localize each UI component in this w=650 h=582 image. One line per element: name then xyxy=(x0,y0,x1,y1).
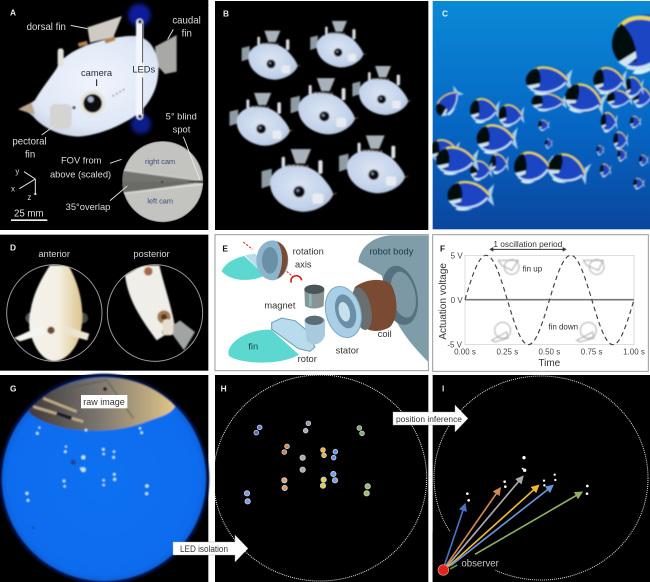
position arrows xyxy=(444,477,582,569)
axis label y: y xyxy=(15,167,19,176)
x tick labels: 0.50 s xyxy=(538,348,560,357)
label: panel letter G: G xyxy=(10,384,16,394)
color coded LED dots xyxy=(244,421,370,504)
observer marker xyxy=(438,565,449,575)
coil xyxy=(353,280,396,331)
label: posterior: posterior xyxy=(133,249,170,259)
label: rotor: rotor xyxy=(298,354,317,364)
label: coil: coil xyxy=(378,329,392,339)
magnet xyxy=(304,289,324,308)
observer label backdrop xyxy=(433,532,510,582)
fisheye camera view xyxy=(0,374,209,582)
label: FOV from above: above (scaled) xyxy=(50,169,111,179)
axes icon xyxy=(19,172,36,195)
x tick labels xyxy=(454,348,645,357)
pointer: pectoral fin xyxy=(42,124,57,135)
label: panel letter B: B xyxy=(223,8,229,18)
label: panel letter A: A xyxy=(10,8,16,18)
scale bar: 25 mm xyxy=(14,209,44,220)
x tick labels: 1.00 s xyxy=(623,348,645,357)
detected LED spots xyxy=(25,427,149,502)
pointer: blind spot xyxy=(183,137,200,180)
label: caudal fin: caudal xyxy=(172,15,201,26)
panel I: position inference xyxy=(433,375,650,582)
label: anterior: anterior xyxy=(38,249,70,259)
dotted field-of-view ellipse xyxy=(434,376,648,580)
fish photo A xyxy=(18,4,177,137)
label: blind spot: spot xyxy=(173,125,191,135)
label: caudal fin: fin xyxy=(182,29,192,40)
body hub xyxy=(377,262,423,328)
inferred positions xyxy=(466,456,589,502)
label: raw image xyxy=(81,395,127,408)
anterior view xyxy=(7,265,102,361)
pointer: dorsal fin xyxy=(71,25,87,29)
x tick labels: 0.25 s xyxy=(496,348,518,357)
swarm of robot fish xyxy=(229,21,411,212)
period arrow xyxy=(489,247,567,252)
zero line xyxy=(465,297,634,302)
y tick labels: -5 V xyxy=(447,340,463,349)
exploded actuator xyxy=(222,235,428,363)
rotation axis dashes xyxy=(243,242,293,277)
label: observer: observer xyxy=(461,559,500,570)
assembled inset xyxy=(222,256,265,280)
label: panel letter E: E xyxy=(222,243,228,253)
dotted field-of-view ellipse xyxy=(213,375,427,581)
panel A: robot fish anatomy xyxy=(0,0,208,230)
panel C: reef fish school xyxy=(430,1,650,229)
label: fin down: fin down xyxy=(548,323,578,332)
rotor xyxy=(272,318,315,351)
plot frame xyxy=(465,255,634,345)
arrow: LED isolation xyxy=(173,535,248,562)
pointer: LEDs xyxy=(141,23,144,114)
label: overlap: 35°overlap xyxy=(66,202,110,212)
panel H: LED isolation xyxy=(213,375,428,582)
arrow: position inference xyxy=(393,405,468,432)
x tick labels: 0.75 s xyxy=(581,348,603,357)
label: panel letter H: H xyxy=(221,384,227,394)
label: pectoral fin: fin xyxy=(25,150,35,161)
pointer: overlap xyxy=(110,186,127,201)
label: panel letter F: F xyxy=(440,243,445,253)
pointer: FOV xyxy=(110,159,122,163)
label: rotation axis: rotation xyxy=(293,246,324,256)
y tick labels: 0 V xyxy=(451,296,463,305)
pointer: camera xyxy=(95,79,98,86)
label: pectoral fin: pectoral xyxy=(12,136,47,147)
panel E: fin actuator exploded view xyxy=(215,235,428,371)
label: FOV from above: FOV from xyxy=(61,155,101,165)
y tick labels: 5 V xyxy=(451,252,463,261)
x axis title: Time xyxy=(538,358,561,369)
label: fin: fin xyxy=(248,341,258,351)
FOV circle xyxy=(122,141,204,222)
school of fish xyxy=(430,4,650,211)
label: stator: stator xyxy=(336,346,359,356)
label: LEDs: LEDs xyxy=(132,65,155,75)
label: raw image: raw image xyxy=(83,397,125,407)
axis label z: z xyxy=(27,193,31,202)
stator xyxy=(320,282,367,342)
arrow: position inference: position inference xyxy=(396,414,462,424)
label: panel letter I: I xyxy=(442,384,444,394)
panel B: robot swarm xyxy=(215,1,428,230)
label: dorsal fin: dorsal fin xyxy=(27,22,66,33)
label: right cam: right cam xyxy=(145,157,175,166)
label: blind spot: 5° blind xyxy=(166,111,197,121)
label: robot body: robot body xyxy=(369,247,414,257)
panel G: raw image xyxy=(0,374,209,582)
fin icons xyxy=(492,260,604,342)
label: fin up: fin up xyxy=(523,264,543,273)
label: oscillation period: 1 oscillation period xyxy=(493,239,563,249)
axis label x: x xyxy=(11,184,15,193)
label: magnet: magnet xyxy=(264,301,296,311)
dashed sine wave xyxy=(465,255,634,345)
fin xyxy=(228,330,299,363)
label: panel letter C: C xyxy=(442,9,448,19)
panel F: actuation voltage chart xyxy=(433,235,648,371)
y tick labels xyxy=(447,252,463,349)
x tick labels: 0.00 s xyxy=(454,348,476,357)
label: rotation axis: axis xyxy=(295,260,312,270)
y axis title: Actuation voltage xyxy=(438,263,449,340)
pointer: caudal fin xyxy=(168,29,173,39)
posterior view xyxy=(107,265,203,361)
panel D: anterior and posterior views xyxy=(0,235,208,371)
robot body xyxy=(358,235,428,362)
rotation arrow xyxy=(291,276,302,283)
label: camera: camera xyxy=(81,68,113,78)
arrow: LED isolation: LED isolation xyxy=(180,544,228,554)
label: left cam: left cam xyxy=(147,196,173,205)
label: panel letter D: D xyxy=(10,243,16,253)
